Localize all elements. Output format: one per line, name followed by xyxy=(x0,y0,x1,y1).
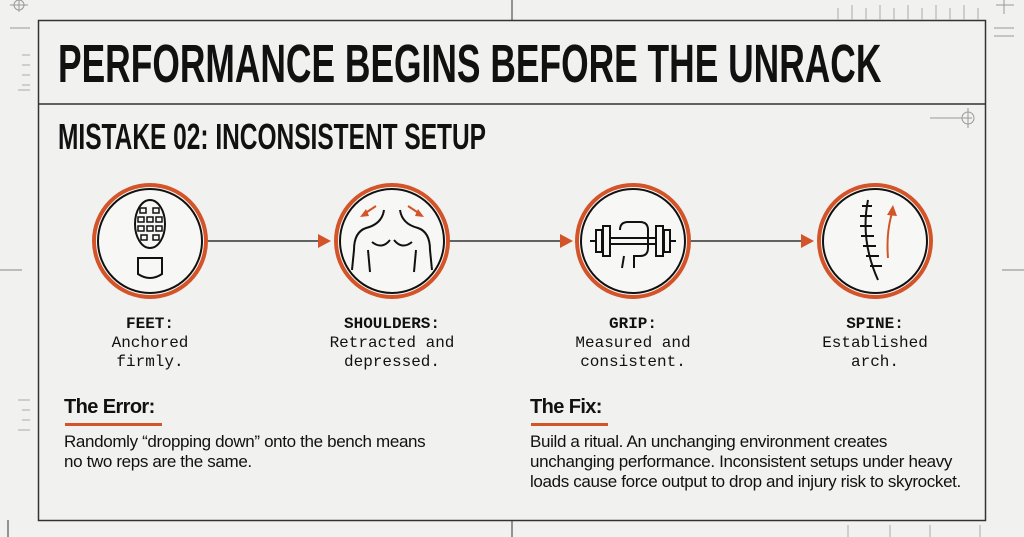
label: spine xyxy=(822,315,928,371)
label: feet: firmly. xyxy=(116,353,184,371)
panel: the error: Randomly “dropping down” onto the bench means xyxy=(64,432,425,451)
panel: the fix xyxy=(530,396,961,491)
label: feet xyxy=(112,315,188,371)
label: grip: Measured and xyxy=(575,334,691,352)
label: shoulders: Retracted and xyxy=(330,334,454,352)
label: grip: consistent. xyxy=(580,353,686,371)
label: feet: FEET: xyxy=(126,315,174,333)
panel: the error: no two reps are the same. xyxy=(64,452,252,471)
panel: the fix: unchanging performance. Inconsistent setups under heavy xyxy=(530,452,952,471)
arrow: feet to shoulders xyxy=(207,234,331,248)
panel: the fix: The Fix: xyxy=(530,396,602,418)
arrow: shoulders to grip xyxy=(449,234,573,248)
label: shoulders xyxy=(330,315,454,371)
label: feet: Anchored xyxy=(112,334,188,352)
panel: the error xyxy=(64,396,425,471)
panel: the error: The Error: xyxy=(64,396,155,418)
label: grip: GRIP: xyxy=(609,315,657,333)
label: shoulders: SHOULDERS: xyxy=(344,315,440,333)
icon: shoulders xyxy=(336,185,448,297)
label: shoulders: depressed. xyxy=(344,353,440,371)
panel: the fix: loads cause force output to drop and injury risk to skyrocket. xyxy=(530,472,961,491)
label: spine: SPINE: xyxy=(846,315,904,333)
arrow: grip to spine xyxy=(690,234,814,248)
icon: feet xyxy=(94,185,206,297)
label: spine: arch. xyxy=(851,353,899,371)
icon: grip xyxy=(577,185,689,297)
subtitle: MISTAKE 02: INCONSISTENT SETUP xyxy=(58,116,486,157)
label: spine: Established xyxy=(822,334,928,352)
title: PERFORMANCE BEGINS BEFORE THE UNRACK xyxy=(58,34,881,94)
icon: spine xyxy=(819,185,931,297)
panel: the fix: Build a ritual. An unchanging environment creates xyxy=(530,432,887,451)
label: grip xyxy=(575,315,691,371)
